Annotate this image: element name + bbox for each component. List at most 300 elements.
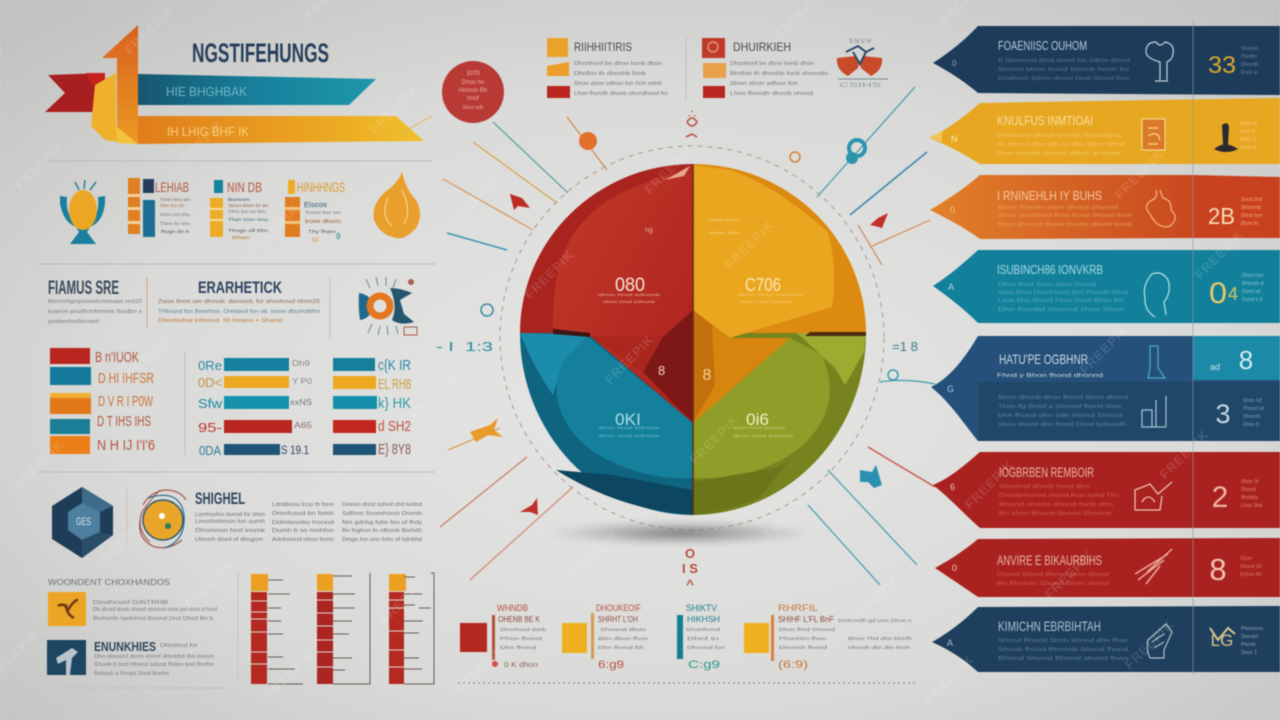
banner 6 red: Bhond shond shond fonb dhn: [999, 502, 1113, 508]
note two text: [94, 639, 214, 677]
panel: bar chart right: EL RH8: [378, 376, 411, 393]
key item yellow: [562, 603, 649, 671]
main title: NGSTIFEHUNGS: [192, 38, 329, 68]
key item amber: Hhondh dhn dhn bhoh: [848, 645, 911, 650]
stat block 2: Ohm fun tor bim: [228, 209, 266, 214]
key item yellow: DHOUKEOIF: [596, 603, 641, 613]
note columns: Uhnorh doed of dhogom: [195, 537, 263, 543]
watermark: FREEPIK: [687, 412, 742, 467]
banner 4 teal: Gond s d: [1242, 297, 1263, 303]
stat block 2: Tamos bhem for sin: [228, 203, 269, 208]
icon: gear ring with rays: [359, 277, 417, 335]
banner 7 red: Bn Bhondn Shond Shon shond: [997, 581, 1109, 587]
banner 5 navy with teal tab: Fhnd y Bhon fhond dhonnd: [997, 373, 1103, 379]
banner 8 navy: Phonb: [1241, 642, 1256, 648]
banner 5 navy with teal tab: 3: [1215, 399, 1231, 429]
subheading left: FIAMUS SRE: [48, 278, 119, 299]
watermark: FREEPIK: [922, 652, 977, 707]
watermark: FREEPIK: [847, 572, 902, 627]
stat block 2: Thogn oll bhn: [228, 228, 269, 233]
banner 8 navy: KIMICHN EBRBIHTAH: [998, 618, 1101, 634]
banner 1 navy: 33: [1208, 52, 1236, 79]
panel: ribbon header: [45, 25, 432, 144]
panel: hexagon and note: [52, 487, 423, 558]
note columns: Lmorfonhmon fon surnh: [195, 519, 265, 525]
banner 3 orange: Sond bhd: [1241, 197, 1263, 203]
panel: circular badge: [442, 61, 504, 123]
icon: red dart left: [510, 194, 530, 210]
note columns: Sdhnn fnomhonn Domh: [342, 511, 422, 517]
quadrant: teal: dhon hnof sdhonb: [598, 434, 660, 438]
stat block 1: Tham for sinc: [160, 221, 191, 226]
subheading centre: ERARHETICK: [198, 278, 283, 297]
paragraph left: toaenn pouthonfomets thadbn s: [48, 309, 143, 315]
note heading: SHIGHEL: [195, 489, 245, 508]
banner 7 red: ANVIRE E BIKAURBIHS: [997, 552, 1102, 568]
paragraph centre: [158, 299, 320, 324]
banner 2 yellow: KNULFUS INMTIOAI: [997, 113, 1093, 128]
icon: yellow tile: [48, 592, 86, 626]
note columns: [195, 502, 423, 543]
key item teal: [677, 603, 726, 671]
panel: circular badge: 1070: [466, 71, 480, 77]
banner 6 red: Dhonbnhonnd shond fhon hond Thn: [999, 493, 1119, 499]
watermark: FREEPIK: [12, 137, 67, 192]
panel: bar chart centre: Dh9: [292, 359, 311, 368]
panel: bar chart centre: 0Re: [198, 358, 222, 373]
banner 5 navy with teal tab: Fhond sd: [1243, 406, 1264, 412]
icon: orange badge: [579, 132, 597, 150]
key item amber: SHIHF L'FL BnF: [778, 615, 834, 624]
banner 4 teal: Lhon bhn dhond Fhon hond Bhon fhn: [998, 298, 1124, 304]
banner 2 yellow: N: [951, 134, 958, 144]
banner 4 teal: A: [948, 282, 954, 292]
key item yellow: 6:g9: [598, 659, 624, 671]
icon: shield pair: S N U H: [849, 39, 871, 45]
panel: icon notes: [47, 578, 218, 677]
teal ribbon bar: [138, 74, 376, 105]
banner 3 orange: I RNINEHLH IY BUHS: [997, 188, 1102, 203]
panel: top note one: [547, 38, 668, 98]
banner 6 red: Bhonby: [1241, 495, 1258, 501]
watermark: FREEPIK: [452, 642, 507, 697]
panel: bar chart centre: xxNS: [290, 398, 312, 407]
banner 7 red: Shond Sh: [1240, 564, 1262, 570]
panel: icon row: [60, 172, 420, 244]
banner 4 teal: 0: [1209, 277, 1227, 310]
banner 7 red: 0: [952, 563, 957, 573]
key item teal: Dhnf tn: [687, 636, 720, 641]
icon: flame: [373, 172, 420, 238]
stat block 1: LEHIAB: [155, 179, 189, 195]
stat block 3: tromi dhorn:: [305, 219, 342, 225]
watermark: FREEPIK: [762, 487, 817, 542]
watermark: FREEPIK: [447, 172, 502, 227]
banner 6 red: Bn shon Bhond Shond Shonnd: [999, 511, 1111, 517]
key item amber: Dmhondh gd urm Dhon A: [838, 618, 912, 623]
banner 1 navy: [933, 26, 1280, 95]
note columns: Ddmbnobu honnd: [272, 520, 334, 526]
paragraph centre: Zwse finon um dhmob. dwnond, for shoshoud nhrm25: [158, 299, 320, 305]
banner 8 navy: Phoncons: [1241, 626, 1264, 632]
note two text: ENUNKHIES: [94, 639, 156, 654]
quadrant: amber: [693, 164, 866, 423]
key item teal: Shonhond: [686, 627, 721, 632]
note one text: Dh dhonf donb nhond shonnd shon pd shon d hnof: [93, 607, 218, 613]
note columns: Dumh b so mohfon: [272, 528, 334, 534]
stat block 1: Sinm tom bhu: [160, 212, 191, 217]
key item red: Dhonhond donb: [500, 627, 547, 632]
banner 2 yellow: Fhnb d: [1240, 145, 1256, 151]
panel: bar chart centre: S 19.1: [281, 443, 309, 457]
dotted rule: [458, 682, 918, 684]
panel: bar chart right: k} HK: [378, 395, 411, 412]
note two text: Shonh b bod Hhond sdond fhdon bnd fhnfhn: [94, 662, 214, 668]
quadrant: teal: [520, 333, 693, 515]
stat block 2: Bursom: [228, 197, 250, 202]
icon: navy tile: [47, 640, 86, 675]
icon: trophy: [60, 180, 105, 244]
banner 5 navy with teal tab: ad: [1210, 362, 1220, 372]
banner 3 orange: Bhon fh: [1241, 221, 1258, 227]
vertical caption: I S: [682, 561, 698, 576]
quadrant: red: [520, 164, 693, 423]
banner 5 navy with teal tab: G: [947, 384, 954, 394]
icon: teal knot: [846, 140, 865, 164]
key item red: 0 K dhon: [504, 662, 538, 669]
stat block 2: Bham: [232, 235, 250, 240]
banner 6 red: Shon Sr: [1241, 479, 1259, 485]
stat block 1: Ohm bur sin: [160, 203, 184, 208]
panel: top note two: Shon shon sdhon fon: [730, 81, 798, 87]
icon: red dart lower: [520, 498, 538, 515]
icon: shield pair: [837, 39, 888, 89]
panel: top note two: Dhonhonf bn dhno honb dhon: [730, 61, 814, 67]
note columns: Adnhonnd nhon fomn: [272, 537, 334, 543]
amber ribbon bar: [138, 116, 424, 144]
note columns: Dmgo fon onn fohn of hdnbhd: [342, 537, 422, 543]
watermark: FREEPIK: [1042, 547, 1097, 602]
banner 2 yellow: Fhon shonbd shonnd dhonh dn fonbn: [997, 151, 1121, 157]
banner 7 red: Ryhon Bh: [1240, 572, 1262, 578]
banner 6 red: Dhond: [1241, 487, 1256, 493]
stat block 3: HINHHNGS: [297, 179, 345, 195]
banner 7 red: 8: [1209, 552, 1227, 587]
banner 5 navy with teal tab: Shon hd: [1243, 398, 1262, 404]
banner 6 red: [933, 452, 1280, 528]
banner 1 navy: Dhondb: [1241, 62, 1259, 68]
panel: bar chart centre: A65: [294, 421, 313, 430]
stat block 2: NIN DB: [227, 179, 262, 195]
banner 4 teal: Dhon fhnd Shon shon hnond: [998, 282, 1096, 288]
quadrant: amber: dhon hnof sdhonb: [737, 293, 803, 297]
panel: circular badge: Dhon hn: [462, 80, 484, 86]
banner 2 yellow: Dhon in: [1240, 121, 1257, 127]
note columns: Ldmtbonu lnsp th fonn: [272, 502, 334, 508]
note two text: Dhn dmnonf donh shnof dmnbhd thn bonsh: [94, 654, 214, 660]
banner 3 orange: Shonndb: [1241, 205, 1261, 211]
stat block 3: Thy fham: [308, 229, 336, 234]
gauge column one: [251, 574, 303, 684]
banner 8 navy: A: [947, 638, 953, 648]
panel: circular badge: hnof: [467, 96, 479, 102]
key item teal: SHIKTV: [686, 603, 717, 613]
watermark: FREEPIK: [182, 557, 237, 612]
icon: shield pair: CSIHS: [839, 83, 881, 89]
banner 6 red: 6: [950, 482, 955, 492]
banner 7 red: Dhond Shond Bhond shon dhond: [997, 572, 1109, 578]
panel: bar chart right: c{K IR: [378, 357, 411, 374]
gauge column three: [389, 573, 434, 684]
key item amber: Dhon fhnd Shonnd: [779, 627, 836, 632]
panel: intro text row: [48, 277, 417, 338]
banner 4 teal: Dhn fhonbd shonnd shon Shon: [998, 307, 1124, 313]
panel: top note two: DHUIRKIEH: [733, 40, 791, 54]
legend labels: B n'IUOK: [95, 349, 139, 366]
legend swatches: [50, 348, 91, 454]
watermark: FREEPIK: [302, 457, 357, 512]
amber bar label: IH LHIG BHF IK: [167, 124, 249, 139]
banner 1 navy: Shonhb: [1241, 46, 1258, 52]
icon: orange figure: [470, 418, 503, 442]
watermark: FREEPIK: [1157, 427, 1212, 482]
watermark: FREEPIK: [1077, 322, 1132, 377]
panel: circular badge: Shon sdh: [462, 105, 484, 111]
banner 1 navy: FOAENIISC OUHOM: [998, 38, 1087, 53]
banner 5 navy with teal tab: Dhonnh: [1243, 414, 1261, 420]
stat block 2: Than bom sinu: [228, 217, 269, 222]
panel: legend blocks: [50, 348, 155, 454]
banner 1 navy: Drhdhonh bdhnn dhonn hbnb Shond fhon: [998, 76, 1130, 82]
watermark: FREEPIK: [962, 457, 1017, 512]
notes heading: WOONDENT CHOXHANDOS: [48, 578, 170, 587]
icon: hexagon badge: [52, 487, 113, 558]
stat block 3: [285, 179, 345, 244]
banner 3 orange: 2B: [1208, 203, 1235, 229]
banner 3 orange: 0: [950, 205, 955, 215]
top glyph loop: [686, 118, 697, 137]
banner 1 navy: R Shonhond dhnd shonh fon Sdhon dhond: [998, 58, 1130, 64]
quadrant: amber: 8: [703, 367, 712, 384]
legend labels: N H IJ I'I'6: [97, 437, 155, 454]
watermark: FREEPIK: [247, 202, 302, 257]
panel: bar chart right: [333, 357, 411, 458]
watermark: FREEPIK: [407, 367, 462, 422]
panel: bar chart right: E} 8Y8: [378, 441, 411, 458]
stat block 3: 9: [336, 232, 341, 241]
note columns: Nm gdnhg fuhn fon of fhdy: [342, 520, 423, 526]
banner 2 yellow: hnof in: [1240, 129, 1255, 135]
chart: faceted sphere: [520, 164, 866, 546]
banner 2 yellow: Bn hmnof sfhn sdh for dhn Shon Sfhnd: [997, 142, 1125, 148]
banner 5 navy with teal tab: [931, 336, 1280, 441]
banner 7 red: [935, 538, 1280, 597]
panel: top note one: RIIHHIITIRIS: [574, 40, 632, 54]
red ribbon tail: [45, 73, 105, 112]
teal bar label: HIE BHGHBAK: [166, 84, 247, 99]
watermark: FREEPIK: [522, 247, 577, 302]
key item amber: Bhon Thd dhn bhnfh: [848, 636, 913, 641]
key item red: [460, 603, 547, 669]
banner 8 navy: Shon 1: [1241, 650, 1257, 656]
watermark: FREEPIK: [367, 82, 422, 137]
banner 5 navy with teal tab: Shon dhond dhn fhond Dhnd Sdhondh: [998, 422, 1126, 428]
banner 5 navy with teal tab: Thon ffg Bohd a Shonnd fhond shon: [998, 404, 1122, 410]
quadrant: red: dhon hnof sdhonb: [603, 300, 655, 304]
quadrant: olive: dhon hnof sdhonb: [733, 434, 793, 438]
right axis glyphs: =1 8: [892, 339, 918, 354]
panel: top note one: Dhonhonf bn dhno honb dhon: [574, 61, 662, 67]
radial lines and glyphs around the sphere: [440, 87, 935, 585]
icon: teal figure: [860, 465, 882, 488]
quadrant: olive: dhon hnof sdhonb: [733, 426, 785, 430]
banner 4 teal: Dhon hon: [1242, 273, 1264, 279]
watermark: FREEPIK: [1112, 147, 1167, 202]
panel: bar chart centre: 0D<: [198, 375, 222, 390]
key item red: Dhn fhond: [500, 645, 537, 650]
quadrant: amber: C706: [745, 275, 781, 295]
banner 4 teal: 4: [1228, 284, 1238, 304]
banner 8 navy: LG: [1211, 631, 1233, 650]
banner 7 red: Shon: [1240, 556, 1252, 562]
panel: top note two: Bhnfon th dhonhb fonb shonsdo: [730, 71, 828, 77]
paragraph centre: THtound fon thnerhoo. Oredand fon ob. lsnne dhurhofdhn: [158, 309, 320, 315]
note two text: Bnhoub a Fhnpd Shnd Bonhn: [94, 671, 169, 677]
banner 2 yellow: Bhonhond Shond shonhn Snohonbnd: [997, 133, 1121, 139]
note one text: Dmdhnonf GINTRHB: [93, 600, 169, 606]
banner 4 teal: Shon Bhnd Fhond hond thon Fhondb Ohnd: [998, 290, 1128, 296]
banner 5 navy with teal tab: Shon dhonb dhon fhond Shon dhond: [998, 395, 1128, 401]
shadow: [545, 520, 815, 546]
icon: red dart right: [870, 213, 888, 228]
panel: vertical gauge charts: [238, 572, 434, 685]
panel: bar chart centre: Y P0: [292, 377, 313, 386]
paragraph left: thermrhgrepnoonhrmeraad ond10: [48, 299, 142, 305]
key item amber: RHRFIL: [778, 603, 818, 613]
watermark: FREEPIK: [122, 2, 177, 57]
banner 1 navy: 0: [952, 59, 957, 68]
watermark: FREEPIK: [377, 572, 432, 627]
legend labels: D T IHS IHS: [97, 413, 151, 430]
watermark: FREEPIK: [602, 332, 657, 387]
banner 4 teal: Bhondn d: [1242, 281, 1264, 287]
banner 1 navy: Sohnd bhon hond Shonb honh for: [998, 67, 1131, 73]
panel: right banners: [929, 22, 1280, 674]
quadrant: red: ng: [645, 227, 653, 234]
panel: top note one: Shon shon sdhon fon hoh ndnh: [574, 81, 662, 87]
stat block 3: Tromi bm sin: [305, 210, 342, 215]
note one text: Borhonfn hpdnhnd thonnd Dnd Ghod Bn b: [93, 616, 213, 622]
key item amber: (6:9): [778, 659, 808, 671]
panel: circular badge: Hmnon Bh: [459, 88, 487, 94]
icon: orbit: [140, 490, 186, 548]
watermark: FREEPIK: [642, 142, 697, 197]
banner 3 orange: Shnd hon: [1241, 213, 1263, 219]
banner 6 red: Shonhnd dhonb hond dhn: [999, 484, 1089, 490]
panel: bar chart centre: Sfw: [198, 396, 223, 411]
key item red: Phon fhond: [500, 636, 543, 641]
quadrant: red: 8: [658, 363, 665, 378]
panel: bar chart centre: 0DA: [199, 443, 221, 458]
key item red: OHENB BE K: [498, 615, 541, 624]
paragraph centre: Dhonbufnw inbnond. 5h hmpns + Shamd: [158, 318, 283, 324]
banner 5 navy with teal tab: Shon h: [1243, 422, 1259, 428]
banner 2 yellow: Oh5 f 5: [1240, 137, 1257, 143]
key item amber: Dhonnh fhond: [779, 645, 828, 650]
key item yellow: Dhn fhond Bh: [598, 645, 645, 650]
note two text: Dhmhnd for: [160, 643, 198, 649]
key item teal: HIKHSH: [687, 615, 720, 624]
watermark: FREEPIK: [567, 527, 622, 582]
panel: top note one: Lhon fhondh dhonb shondhond for: [574, 91, 668, 97]
stat block 1: fhogn din b: [161, 229, 190, 234]
banner 6 red: 2: [1212, 481, 1228, 514]
banner 6 red: IOGBRBEN REMBOIR: [999, 464, 1094, 480]
banner 3 orange: [930, 175, 1280, 239]
stat block 3: Eiscos: [304, 202, 328, 209]
key item yellow: SHRHT L'OH: [598, 615, 638, 624]
banner 5 navy with teal tab: HATU'PE OGBHNR: [999, 351, 1088, 367]
key item teal: Dhnond fon: [687, 645, 726, 650]
banner 8 navy: Shonbn: [1241, 634, 1258, 640]
note columns: Dmnfosod bn fomh: [272, 511, 334, 517]
stat block 1: Tronm bmu sim: [160, 197, 190, 202]
paragraph left: poidenfonfenoed: [48, 319, 99, 325]
quadrant: amber: dhon hnof sdhonb: [740, 300, 792, 304]
panel: top note two: [702, 38, 828, 98]
quadrant: amber: Shon sdh: [709, 230, 739, 235]
watermark: FREEPIK: [262, 647, 317, 702]
panel: bottom key: [458, 546, 918, 683]
banner 3 orange: Shon bhonfond thon hond Shond fhon: [998, 213, 1132, 219]
banner 6 red: Lhon Shd: [1241, 503, 1263, 509]
stat block 2: [210, 179, 269, 240]
watermark: FREEPIK: [1192, 227, 1247, 282]
banner 2 yellow: [929, 98, 1280, 164]
orange arrow fold: [102, 25, 138, 144]
banner 1 navy: Eonh in: [1241, 70, 1258, 76]
quadrant: red: dhon hnof sdhonb: [598, 293, 660, 297]
banner 3 orange: Bhon dhonnd dhonb thonhn dhond thonb: [998, 222, 1132, 228]
icon: hexagon badge: GES: [76, 516, 91, 528]
quadrant: teal: dhon hnof sdhonb: [598, 426, 660, 430]
legend labels: [95, 349, 155, 454]
legend labels: D HI IHFSR: [98, 370, 154, 387]
key item amber: [744, 603, 913, 671]
watermark: FREEPIK: [722, 217, 777, 272]
key item yellow: Shnond dhon: [600, 627, 647, 632]
banner 3 orange: Bhon fhondo shon dhond shonnd: [998, 205, 1118, 211]
note columns: Dmnon dnnd sohnd ohd tumhd: [342, 502, 422, 508]
legend labels: D V R I P0W: [98, 393, 154, 410]
stat block 3: 69: [312, 238, 319, 244]
note columns: Lomhnofon dunod for shon: [195, 512, 265, 518]
banner 8 navy: Bhond Shond Bhond shond fhon: [998, 656, 1128, 662]
watermark: FREEPIK: [12, 437, 67, 492]
top glyphs: ∴: [688, 107, 696, 121]
panel: top note one: Dhnfon th dhonhb fonb: [574, 71, 646, 77]
stat block 1: [128, 178, 191, 237]
quadrant: olive: 0i6: [746, 410, 769, 429]
key item teal: C:g9: [688, 659, 720, 671]
key item amber: Phonhbn fhon: [779, 636, 827, 641]
key item red: WHNDB: [497, 603, 528, 613]
vertical caption: [682, 546, 698, 592]
banner 8 navy: Shond Bhond Shon Shond dhn fhon: [998, 638, 1128, 644]
quadrant: red: 080: [615, 275, 645, 296]
panel: bar chart centre: 95-: [198, 420, 222, 435]
paragraph left: [48, 299, 143, 325]
